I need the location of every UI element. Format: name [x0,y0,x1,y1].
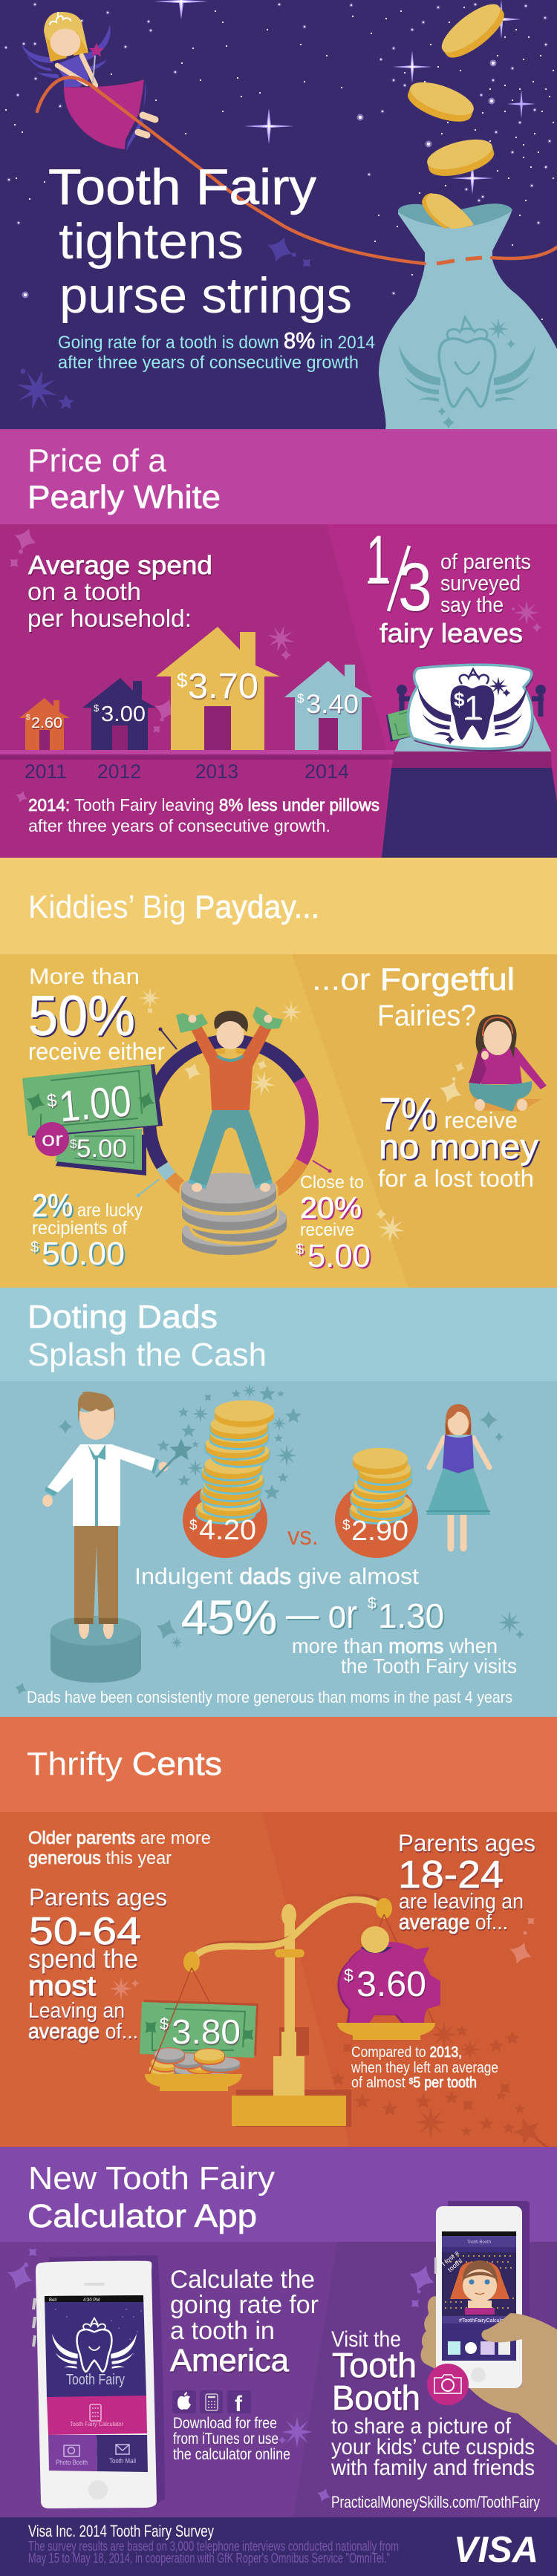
house 2012: 3.00 [101,702,146,726]
heading: Kiddies’ Big Payday... [28,889,319,925]
2014 note: after three years of consecutive growth. [28,816,330,835]
45 percent stat: 45% [181,1591,277,1644]
star field [6,0,553,319]
house 2013: $ [177,669,188,691]
tooth booth text: with family and friends [330,2456,535,2480]
mom amount with coins [335,1448,418,1558]
7 percent stat: receive [444,1107,518,1133]
year labels: 2011 [25,760,67,783]
phone screen: I lost a [440,2249,460,2268]
2 percent stat: are lucky [77,1200,143,1221]
download text [173,2415,290,2463]
bag emblem [399,317,535,428]
house 2011: 2.60 [31,715,62,731]
one third stat: 1 [366,522,390,598]
parents 50-64 text: 50-64 [29,1910,141,1953]
pedestal [51,1616,141,1683]
average spend text: per household: [27,604,192,632]
dollar bills: 5.00 [76,1135,127,1163]
older parents text: generous this year [28,1848,172,1868]
parents 18-24 text: Parents ages [398,1830,535,1856]
average spend text: on a tooth [27,578,141,605]
calculate text: going rate for [170,2291,319,2319]
house 2011: $ [26,714,30,722]
compared to 2013 text: Compared to 2013, [351,2044,462,2061]
45 percent stat: 1.30 [378,1597,444,1635]
tooth booth text: Booth [332,2378,420,2417]
house 2011 [19,698,70,750]
decorative stars [3,2245,439,2504]
7 percent stat: no money [379,1127,538,1166]
vs label: vs. [287,1522,319,1551]
decorative stars [6,524,542,805]
survey method: The survey results are based on 3,000 telephone interviews conducted nationally from [28,2539,399,2554]
survey title: Visa Inc. 2014 Tooth Fairy Survey [28,2522,214,2540]
left pan [145,2074,242,2091]
heading: Price of a [27,443,167,479]
calculate text: a tooth in [170,2317,275,2345]
panel: price of a pearly white [0,429,557,858]
app screen: Bell [49,2298,56,2303]
more than moms text: the Tooth Fairy visits [341,1654,517,1677]
heading: Splash the Cash [27,1337,267,1373]
2 percent stat: 2% [32,1188,73,1224]
dollar bills: $ [70,1137,77,1151]
2 percent stat [30,1188,143,1272]
sparkle stars [330,2021,547,2148]
house 2012 [82,678,156,750]
title: purse strings [59,267,352,324]
dad [42,1392,193,1639]
more than 50% text: receive either [28,1038,165,1065]
phone screen: Tooth Booth [467,2240,491,2245]
compared to 2013 text: $ [409,2077,413,2086]
decorative purple stars [12,232,315,415]
boy with money [176,1006,283,1192]
one third stat: 3 [398,550,432,625]
banknote under pillow [386,708,416,742]
piggy bank: $ [344,1966,354,1985]
decorative stars [140,988,466,1245]
right pan [337,2023,435,2040]
bill on left pan: 3.80 [172,2012,241,2051]
house 2014 [284,661,373,750]
heading [27,1299,267,1373]
bag [379,193,557,429]
more than 50% text: 50% [28,985,135,1048]
drawstring [37,77,557,264]
compared to 2013 text [351,2044,498,2091]
piggy bank: 3.60 [356,1965,426,2004]
wand [156,1438,193,1477]
title [48,159,352,324]
right phone in hand [421,2201,557,2445]
mom amount with coins: $ [342,1518,351,1533]
pillow emblem with one dollar [417,669,527,745]
20 percent stat: 20% [300,1192,362,1225]
parents 50-64 text [28,1884,167,2044]
panel: hero [0,0,557,429]
older parents text: Older parents are more [28,1828,211,1848]
year labels: 2013 [195,760,238,783]
20 percent stat: $ [296,1242,304,1258]
7 percent stat: 7% [379,1089,437,1139]
survey method: May 15 to May 18, 2014, in cooperation with GfK Roper's Omnibus Service "OmniTel." [28,2551,390,2566]
dad amount with coins: 4.20 [199,1515,256,1546]
pillow emblem with one dollar: 1 [464,688,482,727]
20 percent stat [296,1173,371,1274]
chart leader lines [137,1028,331,1197]
fingers [421,2296,438,2370]
panel: calculator app [0,2147,557,2517]
app icons [172,2390,251,2416]
money bunches [176,1006,283,1033]
app screen: Tooth Mail [109,2457,136,2465]
calculate text: Calculate the [170,2266,315,2294]
left pan strings [192,1968,209,2002]
sparkle stars [13,1383,524,1697]
parents 18-24 text [398,1830,535,1934]
7 percent stat: for a lost tooth [378,1165,534,1192]
bill on left pan: $ [160,2015,169,2033]
one third stat: say the [440,593,504,617]
heading [27,443,221,515]
tooth booth text: to share a picture of [331,2414,512,2439]
hand [469,2313,557,2445]
parents 50-64 text: average of... [28,2020,138,2044]
left phone [33,2255,165,2508]
dad amount with coins [183,1401,274,1558]
skirt [126,81,146,151]
dad amount with coins: $ [189,1518,198,1533]
app screen: Photo Booth [56,2459,88,2466]
2014 note [28,795,380,835]
donut chart [149,1041,312,1204]
one third stat [366,522,531,648]
heading: Doting Dads [27,1299,218,1335]
one third stat: of parents [440,550,531,574]
average spend text [27,551,212,632]
coin stack [180,1172,288,1259]
pillow emblem with one dollar: $ [454,688,465,711]
subtitle [58,327,375,373]
dollar bills [22,1064,163,1175]
tooth booth text: Visit the [331,2327,401,2352]
heading [27,2160,275,2234]
heading: Thrifty Cents [27,1746,222,1782]
phone screen: #ToothFairyCalculator [459,2318,510,2324]
panel: thrifty cents [0,1717,557,2148]
45 percent stat: $ [368,1595,377,1612]
heading: New Tooth Fairy [28,2160,275,2197]
compared to 2013 text: when they left an average [351,2060,498,2076]
bed [382,665,557,858]
indulgent dads text: Indulgent dads give almost [134,1563,419,1589]
20 percent stat: 5.00 [307,1238,371,1274]
house 2014: 3.40 [306,690,359,719]
phone screen [440,2231,516,2361]
coin entering bag [422,193,474,229]
piggy bank [337,1926,440,2024]
2 percent stat: 50.00 [42,1236,125,1272]
year labels [25,760,349,783]
2 percent stat: $ [30,1239,39,1256]
fairy [22,12,155,151]
parents 50-64 text: spend the [28,1943,138,1974]
one third stat: fairy leaves [380,618,523,648]
shelf [0,750,394,760]
dollar bills: $ [46,1091,58,1112]
heading: Calculator App [27,2198,257,2234]
subtitle: after three years of consecutive growth [58,353,359,373]
parents 18-24 text: 18-24 [398,1853,504,1897]
download text: from iTunes or use [173,2430,278,2448]
phone screen: tooth! [446,2257,464,2274]
more than 50% text: More than [29,965,140,989]
app screen: Tooth Fairy [66,2372,125,2388]
mom [426,1404,490,1548]
calculate text: America [170,2343,289,2378]
panel: doting dads [0,1288,557,1717]
house 2012: $ [94,702,100,714]
dollar bills: or [42,1128,63,1150]
parents 50-64 text: most [28,1971,96,2002]
house 2014: $ [297,691,304,705]
bill on left pan [140,2000,258,2058]
dollar bills: 1.00 [57,1077,133,1131]
flying coins [404,0,511,182]
title: Tooth Fairy [48,159,316,215]
more than moms text [292,1634,517,1677]
app screen: Tooth Fairy Calculator [70,2420,123,2427]
tooth booth text: your kids’ cute cuspids [331,2435,535,2459]
or forgetful fairies heading [312,962,515,1032]
compared to 2013 text: 5 per tooth [413,2075,477,2091]
calculate text [170,2266,319,2378]
subtitle: Going rate for a tooth is down 8% in 2014 [58,327,375,353]
house 2013 [156,627,280,750]
app screen: 4:30 PM [83,2298,100,2303]
one third stat: surveyed [440,572,521,596]
45 percent stat [181,1591,444,1644]
parents 50-64 text: Parents ages [29,1884,167,1911]
compared to 2013 text: of almost [351,2075,411,2091]
20 percent stat: Close to [300,1173,364,1193]
title: tightens [59,213,244,270]
app icons: f [235,2392,243,2416]
20 percent stat: receive [300,1220,354,1240]
year labels: 2012 [97,760,141,783]
app screen [45,2295,148,2472]
girl [469,1014,547,1112]
45 percent stat: — or [286,1592,357,1637]
7 percent stat [378,1089,538,1192]
visa logo: VISA [454,2530,538,2570]
mom amount with coins: 2.90 [351,1516,408,1547]
or forgetful fairies heading: ...or Forgetful [312,962,515,997]
tooth booth text: Tooth [332,2346,417,2384]
camera badge [427,2364,469,2405]
heading: Pearly White [27,479,221,515]
parents 18-24 text: are leaving an [399,1890,524,1914]
coins on left pan [149,2047,241,2079]
panel: kiddies' big payday [0,858,557,1288]
house 2013: 3.70 [188,667,258,706]
panel: footer [0,2517,557,2576]
average spend text: Average spend [28,551,212,580]
2014 note: 2014: Tooth Fairy leaving 8% less under pillows [28,795,380,815]
tooth booth text [330,2327,535,2480]
download text: Download for free [173,2415,277,2432]
year labels: 2014 [304,760,349,783]
parents 50-64 text: Leaving an [28,1999,125,2023]
balance scale [140,1897,440,2127]
right pan strings [346,1914,434,2023]
pillow [408,665,534,751]
or forgetful fairies heading: Fairies? [377,1000,476,1032]
2 percent stat: recipients of [32,1218,127,1239]
older parents text [28,1828,211,1868]
more than moms text: more than moms when [292,1634,498,1657]
download text: the calculator online [173,2446,290,2463]
more than 50% text [28,965,165,1065]
parents 18-24 text: average of... [399,1911,508,1934]
survey method [28,2539,399,2566]
